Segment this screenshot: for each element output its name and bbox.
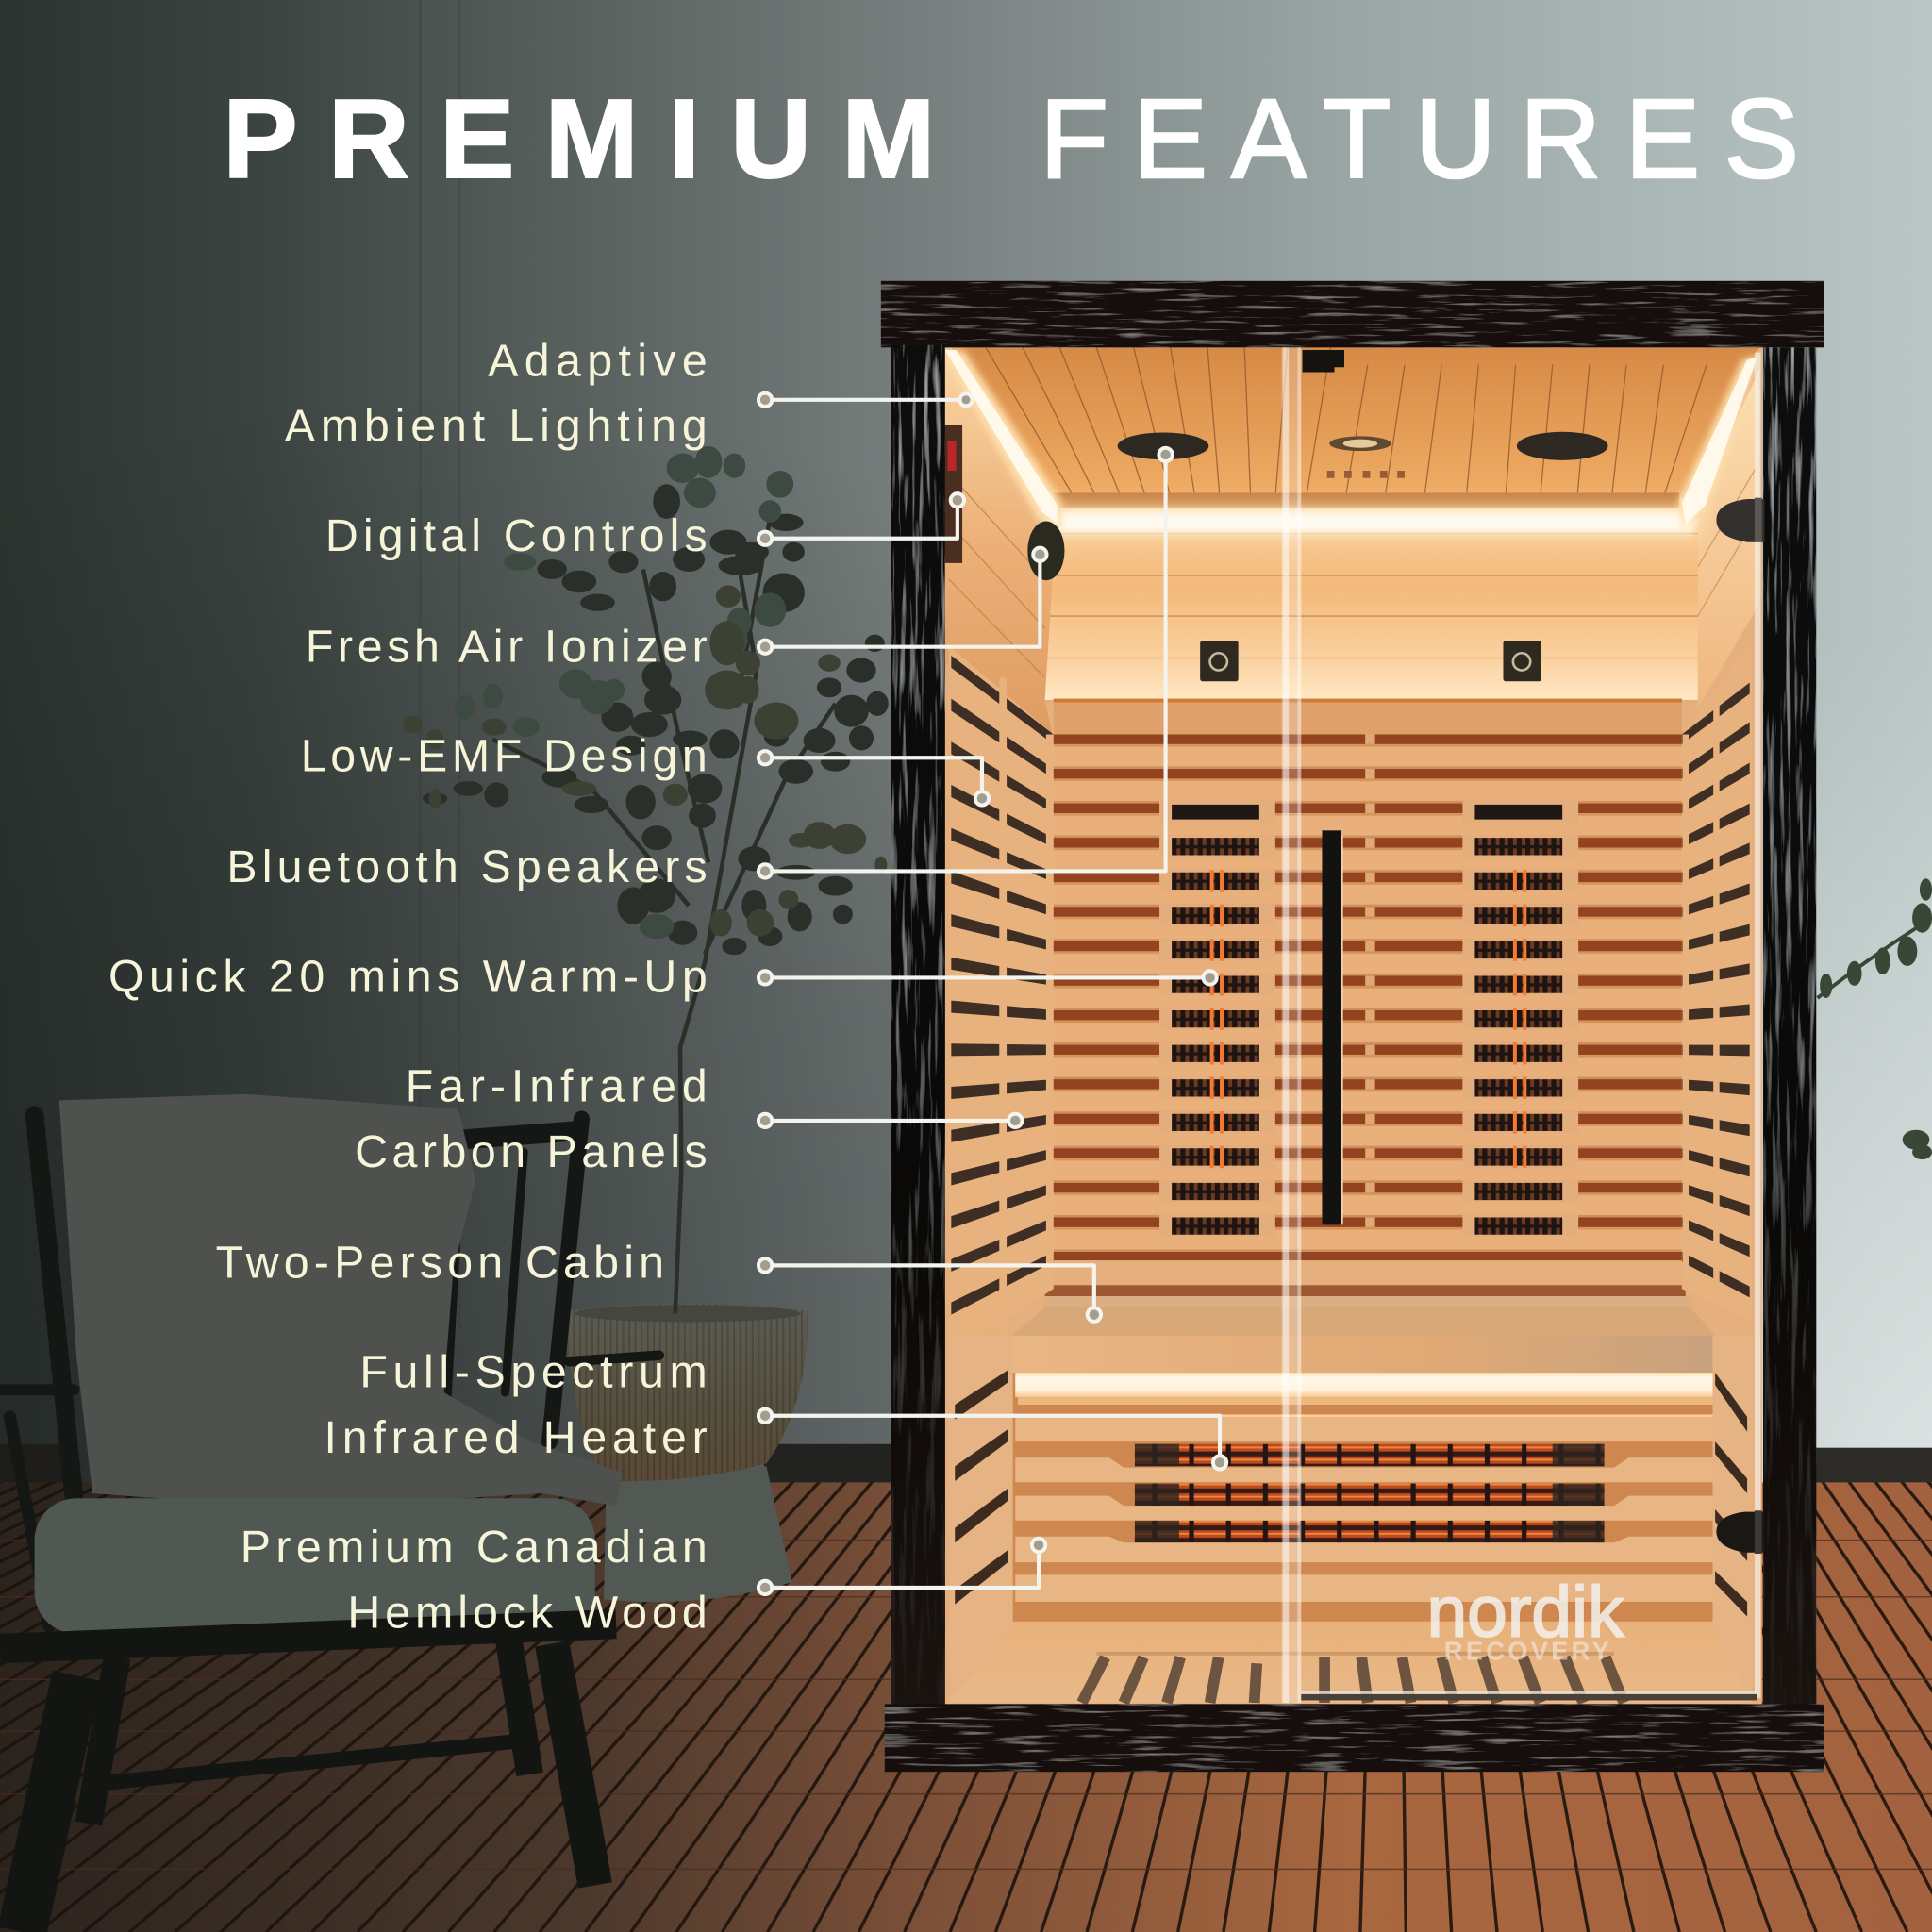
wall sockets <box>1200 641 1541 681</box>
branches <box>492 518 836 1313</box>
lower boards <box>1015 1417 1713 1602</box>
left slatted side wall <box>949 645 1054 1356</box>
interior back <box>945 347 1762 1704</box>
sauna cabin <box>881 281 1824 1772</box>
left carbon panels <box>1159 801 1275 1237</box>
seat cushion <box>35 1498 595 1634</box>
door clamp <box>1303 350 1344 372</box>
label: Far-Infrared Carbon Panels: Far-Infrared <box>406 1061 708 1112</box>
callout: Fresh Air Ionizer <box>758 548 1047 654</box>
sauna floor <box>949 1622 1752 1703</box>
label: Digital Controls: Digital Controls <box>325 510 708 561</box>
callout: Far-Infrared Carbon Panels <box>758 1114 1022 1127</box>
title: FEATURES <box>1040 76 1799 202</box>
eucalyptus leaves <box>403 446 889 955</box>
label: Premium Canadian Hemlock Wood: Premium Canadian <box>241 1522 708 1573</box>
callout: Adaptive Ambient Lighting <box>758 393 973 407</box>
label: Adaptive Ambient Lighting: Ambient Lighting <box>285 401 708 452</box>
bench <box>1011 1307 1715 1373</box>
label: Quick 20 mins Warm-Up: Quick 20 mins Warm-Up <box>108 951 708 1002</box>
brand logo: RECOVERY <box>1444 1636 1609 1665</box>
callout: Quick 20 mins Warm-Up <box>758 971 1217 985</box>
callout: Premium Canadian Hemlock Wood <box>758 1539 1045 1594</box>
label: Full-Spectrum Infrared Heater: Full-Spectrum <box>359 1347 708 1398</box>
lower section under bench <box>949 1336 1752 1703</box>
left upper side wall <box>945 347 1058 744</box>
label: Full-Spectrum Infrared Heater <box>325 1347 708 1463</box>
right plant sprig <box>1818 878 1932 1159</box>
label: Premium Canadian Hemlock Wood <box>241 1522 708 1638</box>
door handle <box>1322 830 1343 1224</box>
label: Low-EMF Design: Low-EMF Design <box>301 731 708 782</box>
ceiling light and vents <box>1327 436 1405 478</box>
top frame <box>881 281 1824 347</box>
label: Far-Infrared Carbon Panels: Carbon Panels <box>355 1126 708 1177</box>
base frame <box>885 1704 1824 1772</box>
upper back wall <box>1045 498 1698 702</box>
plant in pot <box>403 446 889 1602</box>
beam above LED strip <box>1054 492 1679 508</box>
label: Two-Person Cabin: Two-Person Cabin <box>216 1237 664 1288</box>
label: Far-Infrared Carbon Panels <box>355 1061 708 1177</box>
label: Adaptive Ambient Lighting: Adaptive <box>488 335 708 386</box>
baseboard <box>0 1444 1932 1484</box>
ceiling speakers <box>1118 432 1607 460</box>
right carbon panels <box>1462 801 1578 1237</box>
door hinges <box>1716 498 1764 1554</box>
label: Premium Canadian Hemlock Wood: Hemlock Wood <box>347 1587 708 1638</box>
callout: Low-EMF Design <box>758 751 989 806</box>
feature labels <box>108 335 708 1638</box>
label: Bluetooth Speakers: Bluetooth Speakers <box>226 841 708 892</box>
label: Fresh Air Ionizer: Fresh Air Ionizer <box>306 621 708 672</box>
callout: Bluetooth Speakers <box>758 448 1173 878</box>
right slatted side wall <box>1682 641 1752 1321</box>
callout: Digital Controls <box>758 493 964 545</box>
background: wall <box>0 0 1932 1491</box>
left frame post <box>891 345 945 1706</box>
ceiling <box>951 347 1759 498</box>
digital control panel <box>943 425 962 563</box>
title: PREMIUM <box>223 76 935 202</box>
slatted back wall <box>1045 702 1691 1308</box>
chair frame <box>0 1115 659 1626</box>
air ionizer <box>1027 521 1064 580</box>
label: Full-Spectrum Infrared Heater: Infrared Heater <box>325 1412 708 1463</box>
right frame post <box>1763 347 1816 1706</box>
brand logo: nordik <box>1426 1573 1624 1653</box>
callout leader lines <box>758 393 1226 1594</box>
LED lighting strips <box>941 350 1759 535</box>
pot <box>566 1304 808 1602</box>
under-bench LED strip <box>1015 1373 1713 1417</box>
pillow <box>59 1094 623 1508</box>
callout: Two-Person Cabin <box>758 1258 1101 1322</box>
door glass stile <box>1281 347 1760 1703</box>
label: Adaptive Ambient Lighting <box>285 335 708 452</box>
callout: Full-Spectrum Infrared Heater <box>758 1409 1226 1470</box>
right upper side wall <box>1698 370 1759 708</box>
background: wooden floor <box>0 1482 1932 1932</box>
chair <box>0 1094 659 1932</box>
title <box>223 76 1799 202</box>
seat and legs <box>0 1624 616 1932</box>
full-spectrum heaters <box>1135 1444 1605 1542</box>
